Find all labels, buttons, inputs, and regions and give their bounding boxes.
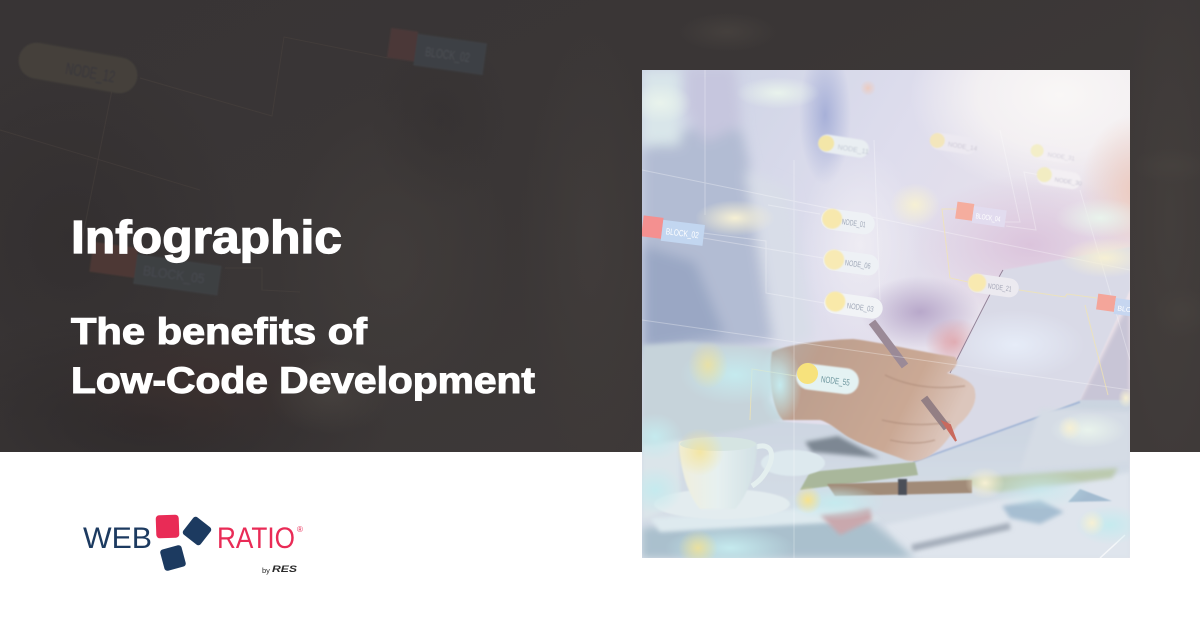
- logo tagline: by RES: by: [262, 566, 270, 575]
- photo: desk and papers: [642, 400, 1130, 558]
- node pill: NODE_06: [823, 249, 878, 275]
- photo: laptop: [1080, 315, 1130, 400]
- logo wordmark: RATIO: RATIO: [217, 522, 295, 555]
- block label: BLOCK_02: BLOCK_02: [665, 226, 699, 240]
- photo: keyboard: [805, 436, 880, 458]
- blurred node pills upper area: NODE_14: [947, 141, 978, 153]
- photo: coffee cup: [679, 437, 772, 509]
- block label: BLOCK_04: [955, 202, 1007, 227]
- block label: BLOCK_02: [641, 215, 705, 246]
- blurred node pills upper area: NODE_31: [1047, 152, 1076, 163]
- subheading: The benefits of Low-Code Development: [71, 311, 535, 401]
- faint node pill in background: [19, 43, 137, 93]
- logo tagline: by RES: RES: [272, 564, 297, 574]
- photo: diagram lines: [642, 70, 1130, 558]
- node pill: NODE_06: NODE_06: [844, 258, 872, 271]
- faint node pill in background: NODE_12: [64, 59, 117, 86]
- faint block label behind heading: BLOCK_05: [142, 262, 206, 287]
- blurred node pills upper area: [817, 131, 1084, 191]
- faint block label in background: BLOCK_02: [424, 44, 471, 65]
- photo: finger shading: [882, 375, 965, 443]
- faint glows in background: [714, 27, 739, 36]
- photo: pen: [872, 322, 956, 441]
- photo: shirt and arm: [642, 70, 782, 354]
- faint block label in background: [387, 28, 487, 75]
- node pill: NODE_01: [821, 208, 874, 232]
- node pill: NODE_03: NODE_03: [846, 301, 875, 314]
- logo: WebRatio by RES: [83, 515, 303, 575]
- photo: shirt cuff and sleeve: [642, 342, 785, 445]
- node pill: NODE_03: [823, 290, 884, 320]
- photo background soft tones: [804, 70, 1130, 359]
- photo: mouse: [761, 450, 825, 476]
- heading: Infographic: Infographic: [71, 211, 342, 263]
- logo registered mark: ®: [297, 525, 303, 534]
- node pill: NODE_55: [795, 362, 860, 396]
- subheading: The benefits of Low-Code Development: Low-Code Development: [71, 360, 535, 401]
- block label: BLOCK_04: BLOCK_04: [975, 211, 1001, 224]
- photo: soft glow spots: [627, 77, 1150, 570]
- logo icon: three rounded squares: [156, 515, 212, 571]
- logo wordmark: WEB: WEB: [83, 522, 152, 555]
- panel: dark background band: [0, 0, 1200, 452]
- photo: coffee saucer: [663, 490, 790, 516]
- block label: right edge: BLOCK: [1117, 305, 1142, 316]
- photo: hand: [770, 339, 975, 461]
- photo: wooden pen on desk: [827, 479, 972, 496]
- node pill: NODE_01: NODE_01: [841, 217, 867, 229]
- logo tagline: by RES: [262, 564, 297, 575]
- faint block label behind heading: [89, 242, 222, 296]
- subheading: The benefits of Low-Code Development: The benefits of: [71, 311, 368, 352]
- blurred node pills upper area: NODE_30: [1054, 177, 1083, 188]
- block label: right edge: [1096, 294, 1130, 316]
- blurred node pills upper area: NODE_11: [837, 144, 869, 156]
- node pill: NODE_21: NODE_21: [987, 281, 1012, 294]
- photo: hand writing with digital node diagram: [642, 70, 1130, 558]
- node pill: NODE_55: NODE_55: [820, 374, 850, 388]
- node pill: NODE_21: [967, 273, 1020, 299]
